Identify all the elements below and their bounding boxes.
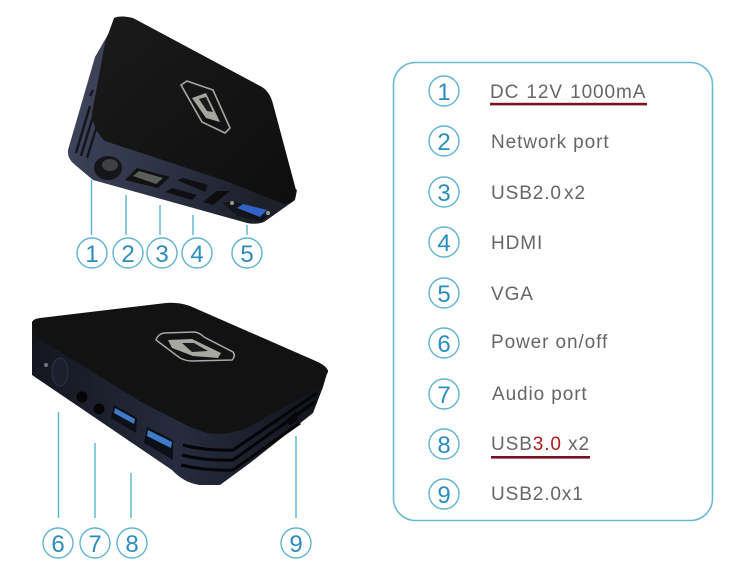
number callouts: rear view: 2 — [121, 241, 135, 268]
legend 9 — [429, 479, 584, 509]
legend 3 — [429, 177, 586, 207]
legend 4: 4 — [437, 230, 451, 257]
legend 5: 5 — [437, 281, 451, 308]
legend 6: 6 — [437, 331, 451, 358]
number callouts: rear view: 5 — [240, 241, 254, 268]
legend 9: 9 — [437, 482, 451, 509]
number callouts: rear view — [77, 238, 262, 268]
logo — [156, 332, 234, 361]
panel border — [394, 62, 712, 520]
USB 2.0 side port — [287, 411, 298, 426]
legend 7: Audio port — [492, 384, 588, 405]
HDMI port — [203, 191, 230, 205]
USB ports — [165, 178, 208, 200]
device photo: rear view — [68, 16, 297, 224]
audio jacks — [76, 392, 104, 414]
device body side — [68, 17, 297, 224]
legend 8: USB3.0 x2 — [491, 434, 590, 455]
number callouts: front view: 9 — [289, 531, 303, 558]
legend 9: USB2.0x1 — [491, 484, 584, 505]
legend 8: 8 — [437, 432, 451, 459]
device photo: front view — [32, 303, 328, 485]
number callouts: front view — [43, 528, 311, 558]
legend 7: 7 — [437, 382, 451, 409]
device body side — [32, 322, 328, 485]
legend 2: Network port — [491, 132, 610, 153]
legend 6 — [429, 328, 608, 358]
USB 3.0 ports — [111, 405, 173, 460]
legend 1: DC 12V 1000mA — [490, 82, 646, 103]
DC power jack — [94, 156, 122, 180]
number callouts: front view: 6 — [51, 531, 65, 558]
number callouts: front view: 7 — [88, 531, 102, 558]
legend 6: Power on/off — [491, 332, 608, 353]
legend 3: 3 — [437, 180, 451, 207]
legend 4 — [429, 227, 543, 257]
legend 2: 2 — [437, 129, 451, 156]
legend 5 — [429, 278, 534, 308]
legend 1: 1 — [437, 79, 451, 106]
legend 4: HDMI — [491, 233, 543, 254]
legend 8 — [429, 429, 590, 459]
device top face — [32, 303, 328, 434]
legend 7 — [429, 379, 588, 409]
right side vents — [181, 393, 317, 470]
network port — [125, 168, 170, 188]
number callouts: rear view: 4 — [190, 241, 204, 268]
number callouts: front view: 8 — [125, 531, 139, 558]
number callouts: rear view: 3 — [155, 241, 169, 268]
VGA port — [222, 201, 270, 222]
panel: port legend — [394, 62, 712, 520]
legend 2 — [429, 126, 610, 156]
callout lines — [58, 180, 296, 518]
device top face — [92, 16, 296, 204]
number callouts: rear view: 1 — [85, 241, 99, 268]
legend 3: USB2.0 x2 — [491, 183, 586, 204]
power button — [44, 358, 68, 386]
logo — [181, 81, 230, 133]
left side vents — [76, 90, 100, 158]
legend 5: VGA — [491, 284, 534, 305]
legend 1 — [429, 76, 647, 106]
